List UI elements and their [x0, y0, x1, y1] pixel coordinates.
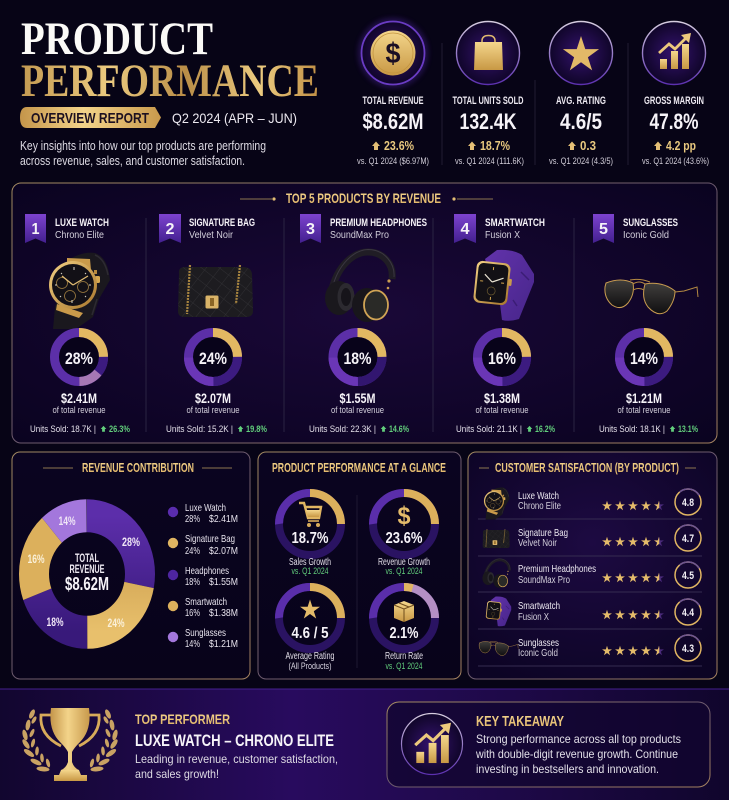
product 5: sunglasses: Units Sold: 18.1K |	[599, 424, 665, 435]
description: Key insights into how our top products are performing	[20, 139, 266, 153]
KPI: total revenue: TOTAL REVENUE	[362, 95, 424, 107]
description: across revenue, sales, and customer satisfaction.	[20, 154, 245, 168]
icon: dollar coin	[370, 30, 416, 76]
row: smartwatch 4.4: 4.4	[682, 607, 695, 619]
product 5: sunglasses: SUNGLASSES	[623, 217, 678, 229]
icon: trophy	[21, 708, 119, 781]
product 3: premium headphones	[300, 214, 427, 435]
gauge: average rating: (All Products)	[288, 661, 332, 672]
product 5: sunglasses: 5	[599, 221, 608, 238]
icon: star	[300, 600, 320, 618]
panel: key takeaway: with double-digit revenue growth. Continue	[475, 747, 678, 761]
panel: key takeaway: Strong performance across all top products	[476, 732, 681, 746]
panel: key takeaway: KEY TAKEAWAY	[476, 713, 564, 730]
image: headphones	[325, 250, 394, 322]
top performer text	[135, 711, 338, 781]
top performer text: Leading in revenue, customer satisfaction,	[135, 752, 338, 766]
donut chart: 28%	[122, 537, 140, 549]
icon: cart	[299, 503, 321, 527]
gauge: return rate: Return Rate	[385, 651, 423, 662]
gauge: return rate: vs. Q1 2024	[386, 661, 422, 672]
legend: $2.07M	[209, 545, 238, 557]
gauge: sales growth: Sales Growth	[289, 557, 331, 568]
legend: 28%	[185, 513, 200, 525]
title: PRODUCT	[21, 13, 213, 65]
gauge: revenue growth: Revenue Growth	[378, 557, 430, 568]
product 1: luxe watch: LUXE WATCH	[55, 217, 109, 229]
product 4: smartwatch: SMARTWATCH	[485, 217, 545, 229]
product 4: smartwatch: of total revenue	[476, 405, 528, 416]
image: quilted bag	[178, 265, 253, 317]
legend: $1.55M	[209, 576, 238, 588]
icon: shopping bag	[474, 36, 503, 70]
KPI: gross margin: 47.8%	[650, 109, 698, 134]
KPI: total units sold: 132.4K	[460, 109, 517, 134]
KPI: average rating	[549, 22, 613, 166]
KPI: total units sold	[452, 22, 524, 166]
panel: key takeaway: investing in bestsellers and innovation.	[476, 762, 659, 776]
row: premium headphones 4.5: SoundMax Pro	[518, 575, 570, 586]
heading: TOP 5 PRODUCTS BY REVENUE	[286, 190, 441, 206]
product 2: signature bag: 2	[166, 221, 175, 238]
donut chart: 24%	[108, 618, 124, 630]
panel: customer satisfaction	[468, 452, 717, 679]
row: sunglasses 4.3: 4.3	[682, 643, 694, 655]
product 5: sunglasses: 14%	[630, 349, 658, 368]
product 5: sunglasses: Iconic Gold	[623, 229, 669, 241]
legend	[168, 502, 238, 650]
legend: Smartwatch	[185, 596, 227, 608]
heading: REVENUE CONTRIBUTION	[82, 460, 194, 475]
KPI: total revenue: $8.62M	[362, 109, 424, 134]
row: luxe watch 4.8: 4.8	[682, 497, 694, 509]
heading: PRODUCT PERFORMANCE AT A GLANCE	[272, 460, 446, 475]
product 5: sunglasses	[593, 214, 698, 435]
product 3: premium headphones: Units Sold: 22.3K |	[309, 424, 376, 435]
row: luxe watch 4.8	[484, 484, 706, 520]
donut: 14%	[615, 328, 673, 386]
donut chart: $8.62M	[65, 574, 109, 594]
row: signature bag 4.7	[483, 520, 706, 556]
row: sunglasses 4.3	[479, 630, 706, 666]
title: PERFORMANCE	[21, 55, 319, 107]
product 2: signature bag	[159, 214, 267, 435]
KPI: total units sold: vs. Q1 2024 (111.6K)	[455, 156, 524, 166]
gauge: revenue growth: 23.6%	[386, 530, 422, 547]
legend: Luxe Watch	[185, 502, 226, 514]
product 2: signature bag: Velvet Noir	[189, 229, 233, 241]
legend: 18%	[185, 576, 200, 588]
gauge: return rate	[373, 587, 435, 672]
row: premium headphones 4.5	[482, 557, 706, 593]
KPI: gross margin	[642, 22, 709, 166]
gauge: average rating	[279, 587, 341, 672]
product 3: premium headphones: $1.55M	[340, 391, 376, 406]
product 2: signature bag: $2.07M	[195, 391, 231, 406]
product 5: sunglasses: $1.21M	[626, 391, 662, 406]
description	[20, 139, 266, 168]
icon: box	[394, 601, 414, 622]
product 3: premium headphones: PREMIUM HEADPHONES	[330, 217, 427, 229]
KPI: total units sold: TOTAL UNITS SOLD	[452, 95, 524, 107]
row: luxe watch 4.8: Luxe Watch	[518, 490, 559, 502]
donut chart: 16%	[28, 554, 44, 566]
panel: product performance at a glance	[258, 452, 461, 679]
KPI row	[357, 21, 709, 166]
overview report pill	[20, 107, 161, 128]
gauge: revenue growth: vs. Q1 2024	[386, 566, 422, 577]
image: smartwatch	[473, 250, 534, 321]
product 3: premium headphones: SoundMax Pro	[330, 229, 389, 241]
row: signature bag 4.7: Signature Bag	[518, 527, 568, 539]
donut chart: 14%	[58, 516, 76, 528]
product 3: premium headphones: 18%	[344, 349, 372, 368]
product 1: luxe watch: of total revenue	[52, 405, 106, 416]
footer band	[0, 689, 729, 800]
gauge: revenue growth	[373, 493, 435, 577]
KPI: gross margin: vs. Q1 2024 (43.6%)	[642, 156, 709, 166]
donut: 18%	[328, 328, 386, 386]
row: sunglasses 4.3: Sunglasses	[518, 637, 559, 649]
product 2: signature bag: of total revenue	[186, 405, 240, 416]
product 2: signature bag: 19.8%	[246, 424, 267, 435]
product 5: sunglasses: of total revenue	[618, 405, 670, 416]
title	[21, 13, 319, 107]
row: luxe watch 4.8: Chrono Elite	[518, 501, 561, 512]
donut chart: 18%	[46, 617, 64, 629]
KPI: average rating: AVG. RATING	[556, 95, 606, 107]
product 1: luxe watch: 28%	[65, 349, 93, 368]
KPI: total units sold: 18.7%	[480, 138, 510, 153]
top performer text: LUXE WATCH – CHRONO ELITE	[135, 732, 334, 750]
overview report pill: OVERVIEW REPORT	[31, 110, 149, 127]
row: smartwatch 4.4	[486, 594, 706, 630]
legend: $1.38M	[209, 607, 238, 619]
product 1: luxe watch: $2.41M	[61, 391, 97, 406]
product 4: smartwatch: 16%	[488, 349, 516, 368]
icon: dollar: $	[398, 502, 411, 530]
product 4: smartwatch: 4	[460, 221, 470, 238]
date range: Q2 2024 (APR – JUN)	[172, 110, 297, 126]
icon: growth chart circle	[402, 714, 462, 774]
gauge: average rating: Average Rating	[286, 651, 334, 662]
gauge: return rate: 2.1%	[390, 625, 418, 642]
product 1: luxe watch: 1	[32, 221, 40, 238]
panel: top 5 products by revenue	[12, 183, 717, 443]
KPI: total revenue: 23.6%	[384, 138, 414, 153]
donut chart: TOTAL	[75, 553, 99, 565]
header block	[20, 13, 319, 168]
donut: 28%	[50, 328, 108, 386]
panel: key takeaway	[387, 702, 710, 787]
icon: growth chart	[659, 33, 691, 69]
donut chart: REVENUE	[70, 564, 105, 576]
KPI: total revenue: vs. Q1 2024 ($6.97M)	[357, 156, 429, 166]
KPI: average rating: 4.6/5	[560, 109, 602, 134]
image: sunglasses	[605, 279, 698, 314]
product 2: signature bag: Units Sold: 15.2K |	[166, 424, 233, 435]
product 3: premium headphones: 3	[306, 221, 315, 238]
KPI: average rating: 0.3	[580, 138, 596, 153]
legend: Sunglasses	[185, 627, 226, 639]
KPI: gross margin: GROSS MARGIN	[644, 95, 704, 107]
legend: Headphones	[185, 565, 229, 577]
top performer text: TOP PERFORMER	[135, 711, 230, 727]
row: premium headphones 4.5: 4.5	[682, 570, 694, 582]
product 1: luxe watch: 26.3%	[109, 424, 130, 435]
product 2: signature bag: SIGNATURE BAG	[189, 217, 255, 229]
gauge: sales growth: 18.7%	[292, 530, 328, 547]
top performer text: and sales growth!	[135, 767, 219, 781]
product 1: luxe watch: Chrono Elite	[55, 229, 104, 241]
KPI: total revenue	[357, 21, 429, 166]
panel: revenue contribution	[12, 452, 250, 679]
product 5: sunglasses: 13.1%	[678, 424, 698, 435]
row: signature bag 4.7: Velvet Noir	[518, 538, 558, 549]
row: smartwatch 4.4: Fusion X	[518, 612, 549, 623]
legend: 16%	[185, 607, 200, 619]
row: smartwatch 4.4: Smartwatch	[518, 600, 560, 612]
image: watch	[49, 253, 110, 329]
product 1: luxe watch: Units Sold: 18.7K |	[30, 424, 96, 435]
product 1: luxe watch	[25, 214, 130, 435]
product 4: smartwatch: Units Sold: 21.1K |	[456, 424, 522, 435]
donut: 24%	[184, 328, 242, 386]
legend: 24%	[185, 545, 200, 557]
legend: $1.21M	[209, 638, 238, 650]
row: sunglasses 4.3: Iconic Gold	[518, 648, 558, 659]
row: signature bag 4.7: 4.7	[682, 533, 694, 545]
product 2: signature bag: 24%	[199, 349, 227, 368]
gauge: average rating: 4.6 / 5	[292, 625, 329, 642]
legend: $2.41M	[209, 513, 238, 525]
donut chart	[28, 516, 140, 632]
icon: star	[563, 36, 599, 70]
product 4: smartwatch: 16.2%	[535, 424, 555, 435]
gauge: sales growth: vs. Q1 2024	[292, 566, 328, 577]
donut: 16%	[473, 328, 531, 386]
product 4: smartwatch	[454, 214, 555, 435]
row: premium headphones 4.5: Premium Headphones	[518, 563, 596, 575]
icon: dollar coin: $	[386, 38, 400, 70]
product 4: smartwatch: Fusion X	[485, 229, 520, 241]
KPI: gross margin: 4.2 pp	[666, 138, 696, 153]
legend: Signature Bag	[185, 533, 235, 545]
KPI: average rating: vs. Q1 2024 (4.3/5)	[549, 156, 613, 166]
gauge: sales growth	[279, 493, 341, 577]
product 4: smartwatch: $1.38M	[484, 391, 520, 406]
product 3: premium headphones: 14.6%	[389, 424, 409, 435]
legend: 14%	[185, 638, 200, 650]
product 3: premium headphones: of total revenue	[331, 405, 384, 416]
